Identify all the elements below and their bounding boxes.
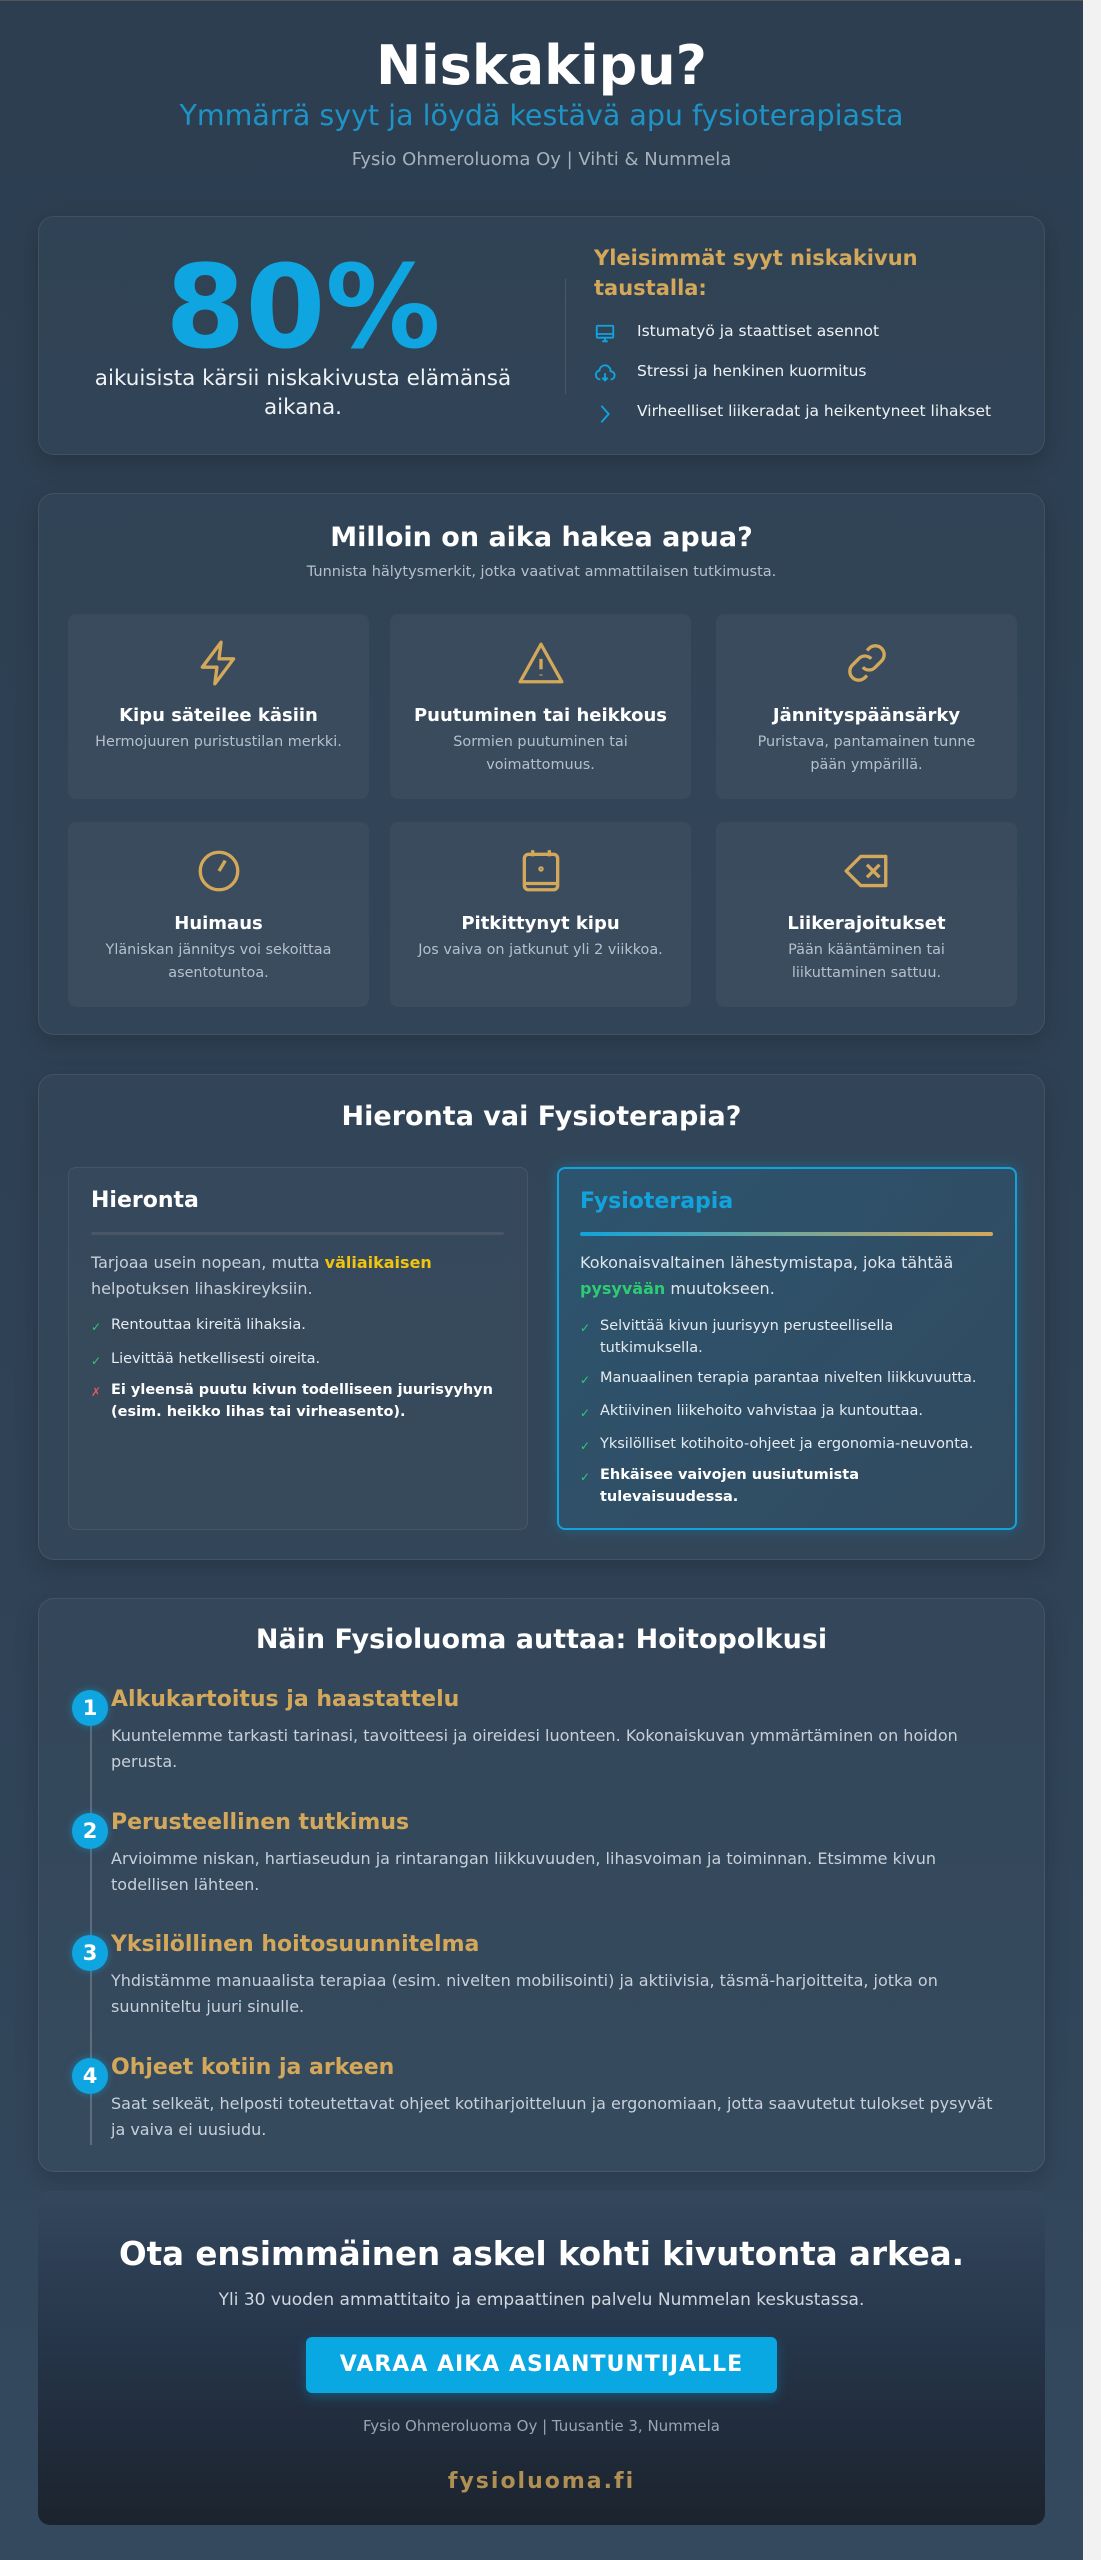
panel: treatment path: Ohjeet kotiin ja arkeen xyxy=(111,2055,394,2080)
box: massage xyxy=(68,1167,528,1530)
cell: headache: Puristava, pantamainen tunne pään ympärillä. xyxy=(758,734,975,773)
box: massage: Lievittää hetkellisesti oireita. xyxy=(111,1351,320,1367)
step 3: Yhdistämme manuaalista terapiaa (esim. nivelten mobilisointi) ja aktiivisia, täsmä-harjoitteita, jotka on suunniteltu juuri sinulle. xyxy=(111,1971,938,2016)
heading: Hieronta vai Fysioterapia? xyxy=(342,1101,741,1132)
cell: numbness: Sormien puutuminen tai voimattomuus. xyxy=(453,734,628,773)
cell: restricted movement: Liikerajoitukset xyxy=(787,913,946,934)
address: Fysio Ohmeroluoma Oy | Tuusantie 3, Nummela xyxy=(363,2417,720,2435)
box: physiotherapy: Selvittää kivun juurisyyn perusteellisella tutkimuksella. xyxy=(600,1318,893,1356)
cell: dizziness xyxy=(68,822,369,1007)
box: physiotherapy: Aktiivinen liikehoito vahvistaa ja kuntouttaa. xyxy=(600,1403,923,1419)
heading: Milloin on aika hakea apua? xyxy=(330,522,753,553)
panel: treatment path: Alkukartoitus ja haastattelu xyxy=(111,1687,459,1712)
box: physiotherapy xyxy=(557,1167,1017,1530)
cause list: Istumatyö ja staattiset asennot xyxy=(637,322,879,340)
step 4 xyxy=(68,2054,992,2139)
step 2: 2 xyxy=(83,1819,97,1843)
box: physiotherapy: ✓ xyxy=(580,1406,590,1420)
box: physiotherapy: ✓ xyxy=(580,1439,590,1453)
box: physiotherapy: ✓ xyxy=(580,1373,590,1387)
cell: prolonged pain: Pitkittynyt kipu xyxy=(461,913,620,934)
subheading: Tunnista hälytysmerkit, jotka vaativat ammattilaisen tutkimusta. xyxy=(307,564,776,580)
box: massage: ✓ xyxy=(91,1320,101,1334)
cause list: Virheelliset liikeradat ja heikentyneet lihakset xyxy=(637,402,991,420)
cell: numbness: Puutuminen tai heikkous xyxy=(414,705,667,726)
step 4: 4 xyxy=(83,2064,97,2088)
icon: chevron xyxy=(600,405,610,423)
panel: treatment path: Perusteellinen tutkimus xyxy=(111,1810,409,1835)
step 1: Kuuntelemme tarkasti tarinasi, tavoitteesi ja oireidesi luonteen. Kokonaiskuvan ymmärtäminen on hoidon perusta. xyxy=(111,1726,958,1771)
subtitle: Ymmärrä syyt ja löydä kestävä apu fysioterapiasta xyxy=(180,99,903,132)
heading: Näin Fysioluoma auttaa: Hoitopolkusi xyxy=(256,1624,827,1655)
step 3: 3 xyxy=(83,1941,97,1965)
cell: prolonged pain: Jos vaiva on jatkunut yli 2 viikkoa. xyxy=(418,942,663,958)
box: physiotherapy: ✓ xyxy=(580,1470,590,1484)
panel: when to seek help xyxy=(38,493,1045,1035)
CTA heading: Ota ensimmäinen askel kohti kivutonta arkea. xyxy=(119,2235,964,2273)
panel: treatment path: Yksilöllinen hoitosuunnitelma xyxy=(111,1932,479,1957)
box: physiotherapy: Kokonaisvaltainen lähestymistapa, joka tähtää pysyvään muutokseen. xyxy=(580,1253,953,1298)
box: massage: Ei yleensä puutu kivun todelliseen juurisyyhyn (esim. heikko lihas tai virheasento). xyxy=(111,1382,493,1420)
step 1 xyxy=(68,1686,958,1771)
website: fysioluoma.fi xyxy=(448,2469,635,2494)
box: massage: Rentouttaa kireitä lihaksia. xyxy=(111,1317,306,1333)
cell: restricted movement xyxy=(716,822,1017,1007)
cell: restricted movement: Pään kääntäminen tai liikuttaminen sattuu. xyxy=(788,942,945,981)
box: physiotherapy: Manuaalinen terapia parantaa nivelten liikkuvuutta. xyxy=(600,1370,976,1386)
panel: call to action xyxy=(38,2191,1045,2525)
box: physiotherapy: Ehkäisee vaivojen uusiutumista tulevaisuudessa. xyxy=(600,1467,859,1505)
panel: treatment path xyxy=(38,1598,1045,2172)
cause list xyxy=(594,322,991,423)
title: Niskakipu? xyxy=(376,34,707,97)
big stat: 80% xyxy=(165,241,441,375)
step 3 xyxy=(68,1932,938,2016)
cell: prolonged pain xyxy=(390,822,691,1007)
cell: headache: Jännityspäänsärky xyxy=(773,705,960,726)
cell: radiating pain xyxy=(68,614,369,799)
button xyxy=(306,2337,777,2393)
box: massage: Hieronta xyxy=(91,1188,199,1213)
box: physiotherapy: Fysioterapia xyxy=(580,1189,733,1214)
cell: headache xyxy=(716,614,1017,799)
company line: Fysio Ohmeroluoma Oy | Vihti & Nummela xyxy=(352,149,731,170)
box: physiotherapy: Yksilölliset kotihoito-ohjeet ja ergonomia-neuvonta. xyxy=(600,1436,973,1452)
icon: cloud xyxy=(594,364,616,382)
box: massage: ✓ xyxy=(91,1354,101,1368)
stat caption: aikuisista kärsii niskakivusta elämänsä aikana. xyxy=(95,366,511,420)
cell: radiating pain: Kipu säteilee käsiin xyxy=(119,705,318,726)
button: VARAA AIKA ASIANTUNTIJALLE xyxy=(340,2352,743,2377)
box: physiotherapy: ✓ xyxy=(580,1321,590,1335)
cell: numbness xyxy=(390,614,691,799)
cell: radiating pain: Hermojuuren puristustilan merkki. xyxy=(95,734,342,750)
causes heading: Yleisimmät syyt niskakivun taustalla: xyxy=(594,246,918,300)
step 2 xyxy=(68,1810,936,1894)
step 2: Arvioimme niskan, hartiaseudun ja rintarangan liikkuvuuden, lihasvoiman ja toiminnan. Etsimme kivun todellisen lähteen. xyxy=(111,1849,936,1894)
step 1: 1 xyxy=(83,1696,97,1720)
box: massage: ✗ xyxy=(91,1385,101,1399)
step 4: Saat selkeät, helposti toteutettavat ohjeet kotiharjoitteluun ja ergonomiaan, jotta saavutetut tulokset pysyvät ja vaiva ei uusiudu. xyxy=(111,2094,992,2139)
CTA subtext: Yli 30 vuoden ammattitaito ja empaattinen palvelu Nummelan keskustassa. xyxy=(219,2290,864,2310)
cause list: Stressi ja henkinen kuormitus xyxy=(637,362,866,380)
cell: dizziness: Yläniskan jännitys voi sekoittaa asentotuntoa. xyxy=(106,942,331,981)
box: massage: Tarjoaa usein nopean, mutta väliaikaisen helpotuksen lihaskireyksiin. xyxy=(91,1253,432,1298)
panel: statistic xyxy=(38,216,1045,455)
cell: dizziness: Huimaus xyxy=(174,913,263,934)
panel: massage vs physiotherapy xyxy=(38,1074,1045,1560)
icon: monitor xyxy=(596,324,614,342)
